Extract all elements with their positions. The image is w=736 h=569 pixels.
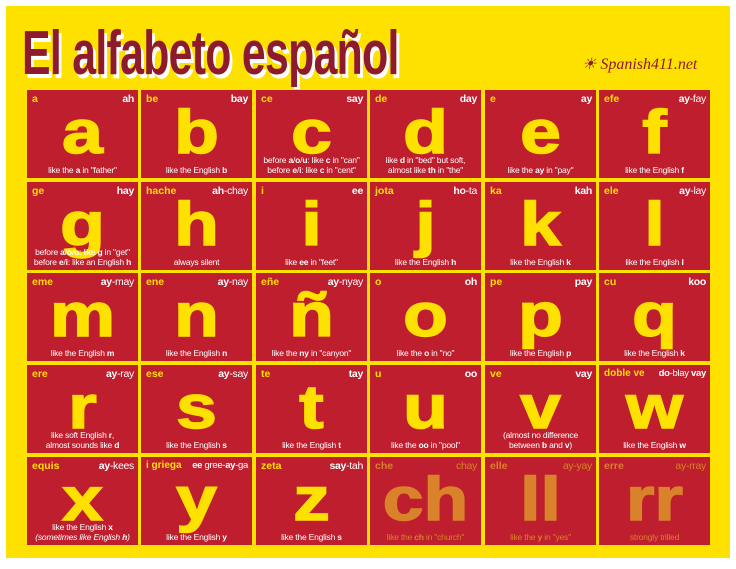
- cell p: [485, 273, 596, 361]
- cell k: k: [520, 190, 561, 258]
- cell s: [141, 365, 252, 453]
- cell g: ge: [32, 185, 44, 197]
- cell o: [370, 273, 481, 361]
- cell u: u: [403, 373, 448, 441]
- cell o: like the o in "no": [397, 348, 454, 358]
- cell q: q: [632, 281, 677, 349]
- cell w: w: [626, 373, 683, 441]
- cell d: like d in "bed" but soft,: [386, 155, 465, 165]
- cell n: ay-nay: [218, 276, 248, 288]
- cell h: hache: [146, 185, 176, 197]
- cell l: like the English l: [625, 257, 684, 267]
- cell c: ce: [261, 93, 273, 105]
- cell q: cu: [604, 276, 616, 288]
- cell l: ele: [604, 185, 619, 197]
- cell q: koo: [688, 276, 706, 288]
- cell y: like the English y: [166, 532, 227, 542]
- cell r: like soft English r,: [51, 430, 114, 440]
- cell x: x: [62, 465, 103, 533]
- cell o: o: [403, 281, 448, 349]
- cell e: e: [520, 98, 561, 166]
- cell s: ese: [146, 368, 164, 380]
- cell j: jota: [375, 185, 394, 197]
- cell e: e: [490, 93, 496, 105]
- cell x: [27, 457, 138, 545]
- cell v: v: [520, 373, 561, 441]
- cell j: like the English h: [395, 257, 456, 267]
- cell a: [27, 90, 138, 178]
- cell f: ay-fay: [679, 93, 706, 105]
- cell g: before e/i: like an English h: [34, 257, 131, 267]
- cell ch: like the ch in "church": [387, 532, 464, 542]
- cell y: ee gree-ay-ga: [192, 460, 248, 471]
- cell h: always silent: [174, 257, 219, 267]
- cell i: [256, 182, 367, 270]
- logo: ☀ Spanish411.net: [582, 56, 697, 73]
- cell w: do-blay vay: [659, 368, 706, 379]
- cell ñ: ay-nyay: [328, 276, 363, 288]
- cell ñ: [256, 273, 367, 361]
- cell i: i: [301, 190, 322, 258]
- cell m: m: [50, 281, 115, 349]
- cell z: z: [293, 465, 330, 533]
- cell s: s: [176, 373, 217, 441]
- cell x: equis: [32, 460, 59, 472]
- cell b: b: [174, 98, 219, 166]
- cell v: ve: [490, 368, 502, 380]
- cell t: t: [299, 373, 324, 441]
- cell o: o: [375, 276, 381, 288]
- cell q: like the English k: [624, 348, 685, 358]
- cell k: ka: [490, 185, 502, 197]
- cell v: vay: [575, 368, 592, 380]
- cell r: almost sounds like d: [46, 440, 119, 450]
- cell rr: rr: [626, 465, 683, 533]
- cell ch: chay: [456, 460, 477, 472]
- cell s: ay-say: [218, 368, 248, 380]
- cell t: te: [261, 368, 270, 380]
- cell j: [370, 182, 481, 270]
- cell n: like the English n: [166, 348, 227, 358]
- cell y: i griega: [146, 460, 182, 471]
- cell i: ee: [352, 185, 363, 197]
- cell j: j: [415, 190, 436, 258]
- cell o: oh: [465, 276, 477, 288]
- cell f: [599, 90, 710, 178]
- cell b: be: [146, 93, 158, 105]
- cell n: [141, 273, 252, 361]
- cell r: [27, 365, 138, 453]
- cell p: pe: [490, 276, 502, 288]
- cell c: [256, 90, 367, 178]
- cell m: [27, 273, 138, 361]
- cell u: u: [375, 368, 381, 380]
- cell h: ah-chay: [212, 185, 248, 197]
- cell p: like the English p: [510, 348, 571, 358]
- cell v: (almost no difference: [503, 430, 578, 440]
- cell e: [485, 90, 596, 178]
- title: El alfabeto español: [22, 19, 399, 88]
- cell a: ah: [122, 93, 134, 105]
- cell ch: ch: [383, 465, 468, 533]
- cell f: efe: [604, 93, 619, 105]
- cell a: like the a in "father": [48, 165, 117, 175]
- cell j: ho-ta: [453, 185, 477, 197]
- cell l: [599, 182, 710, 270]
- cell m: ay-may: [101, 276, 134, 288]
- cell w: like the English w: [623, 440, 686, 450]
- cell h: h: [174, 190, 219, 258]
- cell ll: ay-yay: [563, 460, 592, 472]
- cell c: c: [291, 98, 332, 166]
- cell w: doble ve: [604, 368, 645, 379]
- cell b: like the English b: [166, 165, 227, 175]
- cell b: bay: [231, 93, 248, 105]
- cell m: like the English m: [51, 348, 114, 358]
- cell p: pay: [575, 276, 592, 288]
- cell rr: erre: [604, 460, 624, 472]
- cell l: ay-lay: [679, 185, 706, 197]
- cell u: [370, 365, 481, 453]
- cell m: eme: [32, 276, 53, 288]
- cell y: y: [176, 465, 217, 533]
- cell ñ: ñ: [289, 281, 334, 349]
- cell l: l: [644, 190, 665, 258]
- cell ñ: like the ny in "canyon": [272, 348, 351, 358]
- cell v: [485, 365, 596, 453]
- cell d: de: [375, 93, 387, 105]
- cell g: hay: [117, 185, 134, 197]
- cell d: almost like th in "the": [388, 165, 463, 175]
- cell ll: ll: [520, 465, 561, 533]
- cell d: day: [460, 93, 477, 105]
- cell n: n: [174, 281, 219, 349]
- cell g: [27, 182, 138, 270]
- cell c: say: [346, 93, 363, 105]
- cell a: a: [32, 93, 38, 105]
- cell t: like the English t: [282, 440, 341, 450]
- cell r: ere: [32, 368, 48, 380]
- cell rr: [599, 457, 710, 545]
- cell x: (sometimes like English h): [35, 532, 130, 542]
- cell c: before e/i: like c in "cent": [267, 165, 356, 175]
- cell y: [141, 457, 252, 545]
- cell i: i: [261, 185, 264, 197]
- cell e: ay: [581, 93, 592, 105]
- cell t: [256, 365, 367, 453]
- cell u: oo: [465, 368, 477, 380]
- cell k: [485, 182, 596, 270]
- cell g: before a/o/u: like g in "get": [35, 247, 130, 257]
- cell n: ene: [146, 276, 164, 288]
- cell x: ay-kees: [99, 460, 134, 472]
- cell r: r: [68, 373, 97, 441]
- cell c: before a/o/u: like c in "can": [263, 155, 360, 165]
- cell i: like ee in "feet": [285, 257, 338, 267]
- cell g: g: [60, 190, 105, 258]
- cell e: like the ay in "pay": [508, 165, 573, 175]
- cell q: [599, 273, 710, 361]
- cell ll: elle: [490, 460, 508, 472]
- cell rr: strongly trilled: [630, 532, 679, 542]
- cell f: f: [642, 98, 667, 166]
- cell w: [599, 365, 710, 453]
- cell p: p: [518, 281, 563, 349]
- cell ñ: eñe: [261, 276, 279, 288]
- cell r: ay-ray: [106, 368, 134, 380]
- cell u: like the oo in "pool": [391, 440, 460, 450]
- cell z: [256, 457, 367, 545]
- cell k: like the English k: [510, 257, 571, 267]
- cell s: like the English s: [166, 440, 227, 450]
- cell ch: [370, 457, 481, 545]
- cell d: [370, 90, 481, 178]
- cell h: [141, 182, 252, 270]
- cell z: zeta: [261, 460, 281, 472]
- alphabet grid: [26, 89, 716, 549]
- cell b: [141, 90, 252, 178]
- cell ch: che: [375, 460, 393, 472]
- cell ll: [485, 457, 596, 545]
- cell rr: ay-rray: [675, 460, 706, 472]
- cell x: like the English x: [52, 522, 113, 532]
- cell t: tay: [349, 368, 363, 380]
- cell v: between b and v): [509, 440, 572, 450]
- cell a: a: [62, 98, 103, 166]
- cell k: kah: [575, 185, 592, 197]
- cell ll: like the y in "yes": [510, 532, 571, 542]
- cell z: say-tah: [329, 460, 363, 472]
- cell f: like the English f: [625, 165, 684, 175]
- cell z: like the English s: [281, 532, 342, 542]
- cell d: d: [403, 98, 448, 166]
